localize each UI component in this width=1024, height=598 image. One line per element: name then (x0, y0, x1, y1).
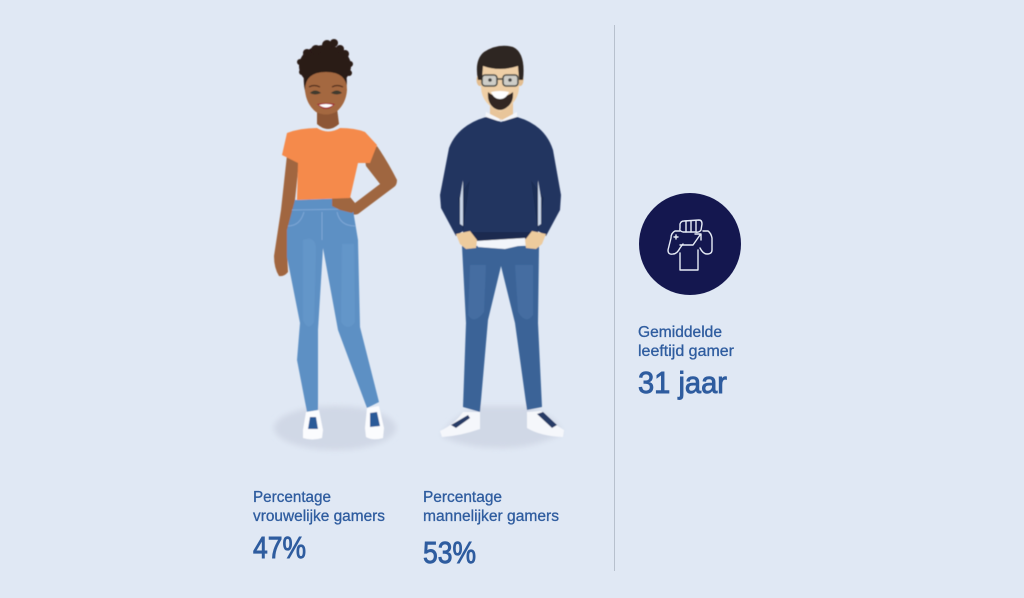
man hair (477, 46, 524, 80)
man face (476, 62, 524, 112)
value: 47%: 47% (253, 530, 306, 565)
woman bent arm (332, 146, 397, 215)
text block: percentage male gamers: Percentage (423, 489, 502, 506)
divider (614, 25, 615, 571)
icon circle (639, 193, 741, 295)
woman jeans (287, 198, 379, 412)
text block: percentage male gamers: mannelijker gamers (423, 508, 559, 525)
text block: percentage male gamers (423, 489, 559, 570)
woman hand on hip (332, 197, 358, 213)
man hands (456, 231, 546, 249)
woman orange shirt (282, 128, 377, 200)
text block: percentage female gamers (253, 489, 385, 565)
woman hanging arm and hand (274, 155, 299, 276)
woman hair (297, 39, 353, 94)
value: 31 jaar: 31 jaar (638, 365, 727, 400)
man floor shadow (441, 406, 562, 448)
man neck and collar (485, 100, 517, 124)
text block: average gamer age: Gemiddelde (638, 324, 722, 341)
text block: average gamer age (638, 324, 734, 400)
icon outline (668, 220, 712, 270)
man sneakers (440, 411, 564, 437)
text block: average gamer age: leeftijd gamer (638, 343, 734, 360)
figure: woman gamer (274, 39, 397, 450)
woman neck and face (305, 72, 347, 129)
icon: fist holding game controller (639, 193, 741, 295)
man white shirt hem (476, 238, 527, 249)
text block: percentage female gamers: Percentage (253, 489, 331, 506)
woman floor shadow (274, 406, 396, 450)
man jeans (462, 246, 542, 412)
woman sneakers (303, 406, 384, 440)
value: 53%: 53% (423, 535, 476, 570)
man navy sweater (440, 117, 561, 242)
text block: percentage female gamers: vrouwelijke gamers (253, 508, 385, 525)
figure: man gamer (440, 46, 564, 448)
